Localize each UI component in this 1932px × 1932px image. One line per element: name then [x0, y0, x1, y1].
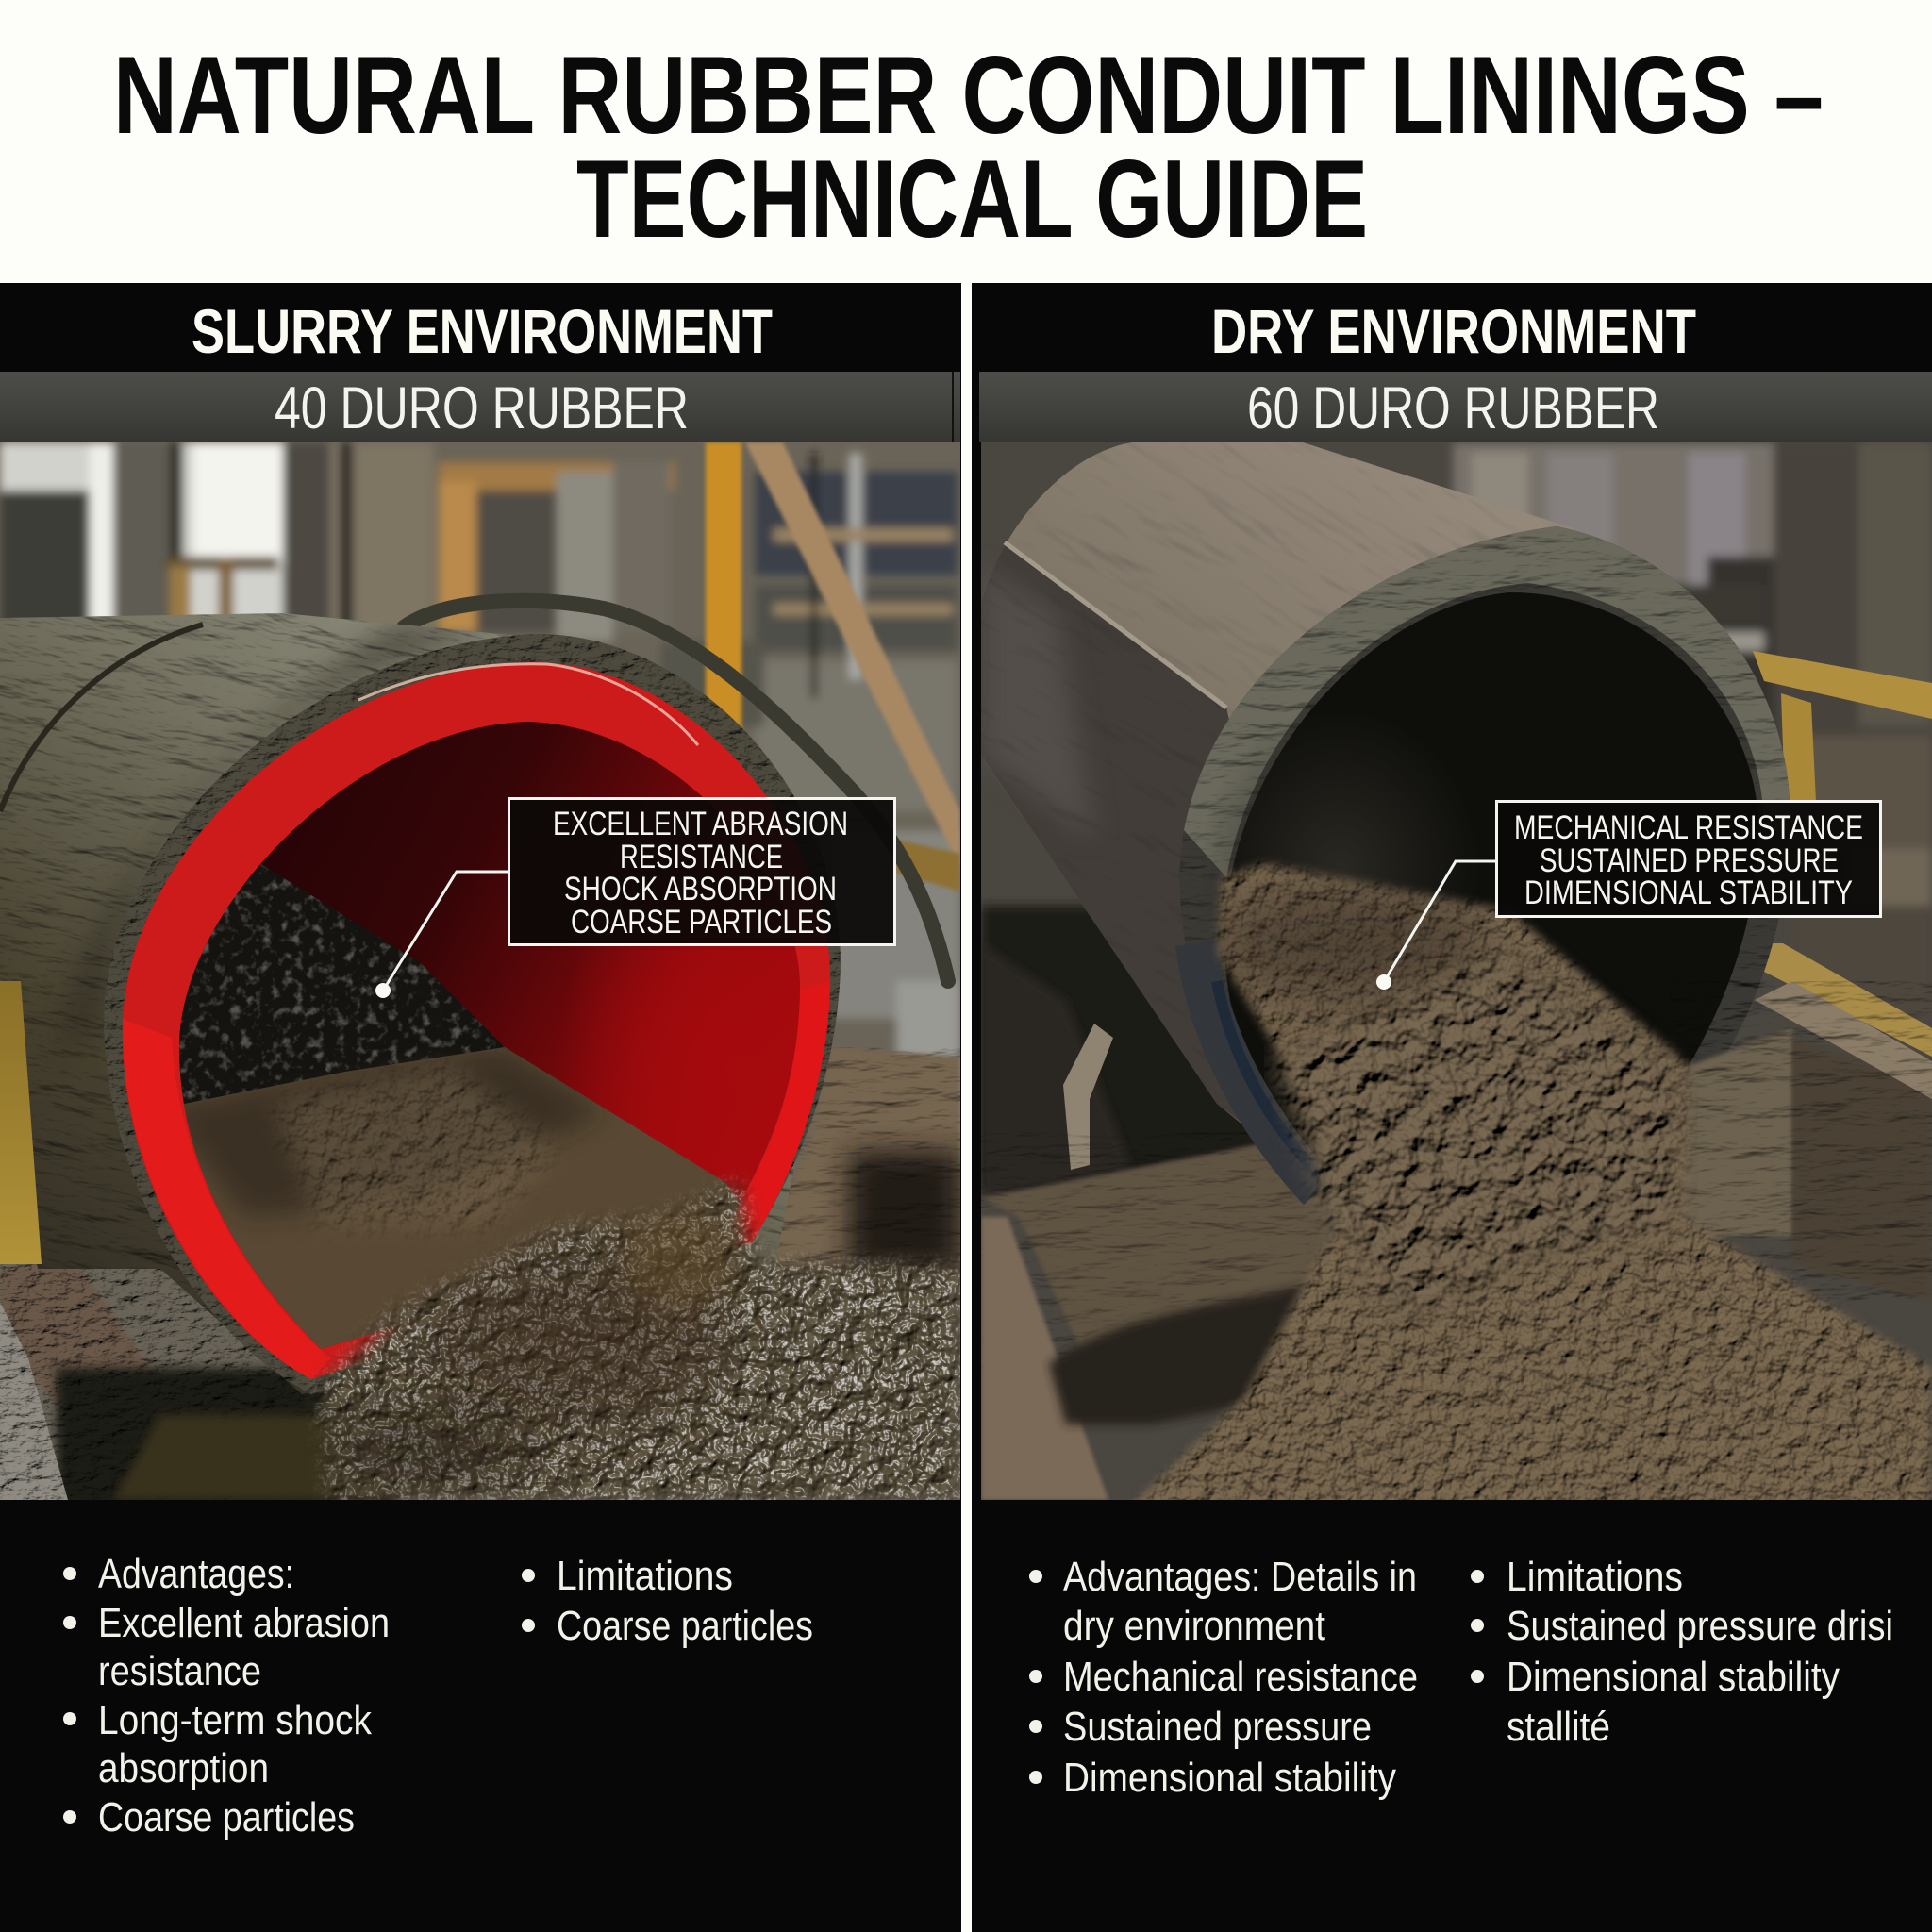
pipe seam — [0, 625, 203, 811]
slurry bullets: advantages: resistance — [98, 1648, 261, 1694]
rim — [1179, 526, 1790, 1187]
dry subheading bar: 60 DURO RUBBER — [1247, 375, 1659, 441]
floor debris — [275, 1063, 547, 1232]
pipe body — [0, 613, 830, 1394]
trough right wall — [1670, 1028, 1792, 1236]
slurry heading: SLURRY ENVIRONMENT — [192, 296, 773, 366]
slurry pour and wet ground — [113, 1415, 396, 1500]
callout: dry properties: DIMENSIONAL STABILITY — [1524, 874, 1853, 911]
falling stream clumps — [1264, 943, 1698, 1340]
dry bullets: limitations: stallité — [1507, 1704, 1610, 1750]
title — [113, 33, 1824, 260]
dry bullets: advantages: Mechanical resistance — [1063, 1654, 1418, 1700]
photo: dry material pouring from pipe — [466, 22, 1932, 1619]
yellow rails — [1753, 651, 1932, 719]
title: TECHNICAL GUIDE — [576, 137, 1368, 260]
callout: slurry properties: EXCELLENT ABRASION — [553, 806, 848, 842]
yellow post — [0, 981, 42, 1264]
callout: slurry properties: COARSE PARTICLES — [571, 904, 832, 941]
dry subheading bar — [979, 372, 1932, 442]
dark coarse particles — [179, 864, 505, 1107]
dark base — [981, 906, 1321, 1189]
rim — [104, 634, 841, 1394]
leader line — [383, 872, 508, 991]
muck floor — [184, 1047, 740, 1349]
pipe body — [981, 442, 1574, 1189]
slurry subheading bar: 40 DURO RUBBER — [275, 375, 689, 441]
dry bullets: advantages — [1029, 1554, 1418, 1801]
pipe interior — [1224, 592, 1758, 1170]
slurry bullets: advantages: Advantages: — [98, 1551, 294, 1597]
callout: dry properties: SUSTAINED PRESSURE — [1540, 842, 1839, 879]
hose — [404, 601, 948, 981]
dry bullets: advantages: Sustained pressure — [1063, 1704, 1372, 1750]
callout: slurry properties — [375, 798, 894, 998]
concrete trough right — [777, 1049, 960, 1262]
panel: slurry environment — [0, 283, 961, 1932]
material pile — [1113, 849, 1932, 1509]
callout: dry properties — [1376, 802, 1881, 990]
trough left — [0, 1265, 147, 1400]
photo: slurry pouring from red-lined pipe — [0, 442, 960, 1500]
panel: dry environment — [466, 22, 1932, 1932]
trough left slab — [981, 1217, 1108, 1500]
slurry subheading bar — [0, 372, 960, 442]
darker lower pipe section below seam — [981, 542, 1340, 1198]
slurry bullets: advantages — [63, 1551, 390, 1840]
slurry bullets: advantages: Coarse particles — [98, 1794, 355, 1840]
dry heading: DRY ENVIRONMENT — [1211, 296, 1696, 366]
slurry bullets: limitations: Limitations — [557, 1553, 733, 1599]
callout: slurry properties: RESISTANCE — [620, 839, 783, 875]
dry bullets: advantages: Advantages: Details in — [1063, 1554, 1417, 1600]
dry bullets: advantages: dry environment — [1063, 1603, 1325, 1649]
callout: slurry properties: SHOCK ABSORPTION — [564, 871, 837, 908]
slurry bullets: advantages: absorption — [98, 1745, 269, 1791]
dry bullets: advantages: Dimensional stability — [1063, 1755, 1396, 1801]
red lining ring — [123, 662, 830, 1379]
shadow — [1049, 1283, 1340, 1424]
slurry bullets: advantages: Excellent abrasion — [98, 1600, 390, 1646]
pipe interior — [179, 722, 800, 1349]
leader line — [1384, 861, 1495, 982]
dry bullets: limitations: Limitations — [1507, 1554, 1683, 1600]
orange post and beam — [706, 442, 741, 735]
pipe bottom lip — [1196, 943, 1319, 1191]
slurry bullets: limitations — [522, 1553, 813, 1649]
slurry bullets: limitations: Coarse particles — [557, 1603, 813, 1649]
dry bullets: limitations — [1471, 1554, 1893, 1750]
dry bullets: limitations: Dimensional stability — [1507, 1654, 1840, 1700]
slurry bullets: advantages: Long-term shock — [98, 1697, 373, 1743]
